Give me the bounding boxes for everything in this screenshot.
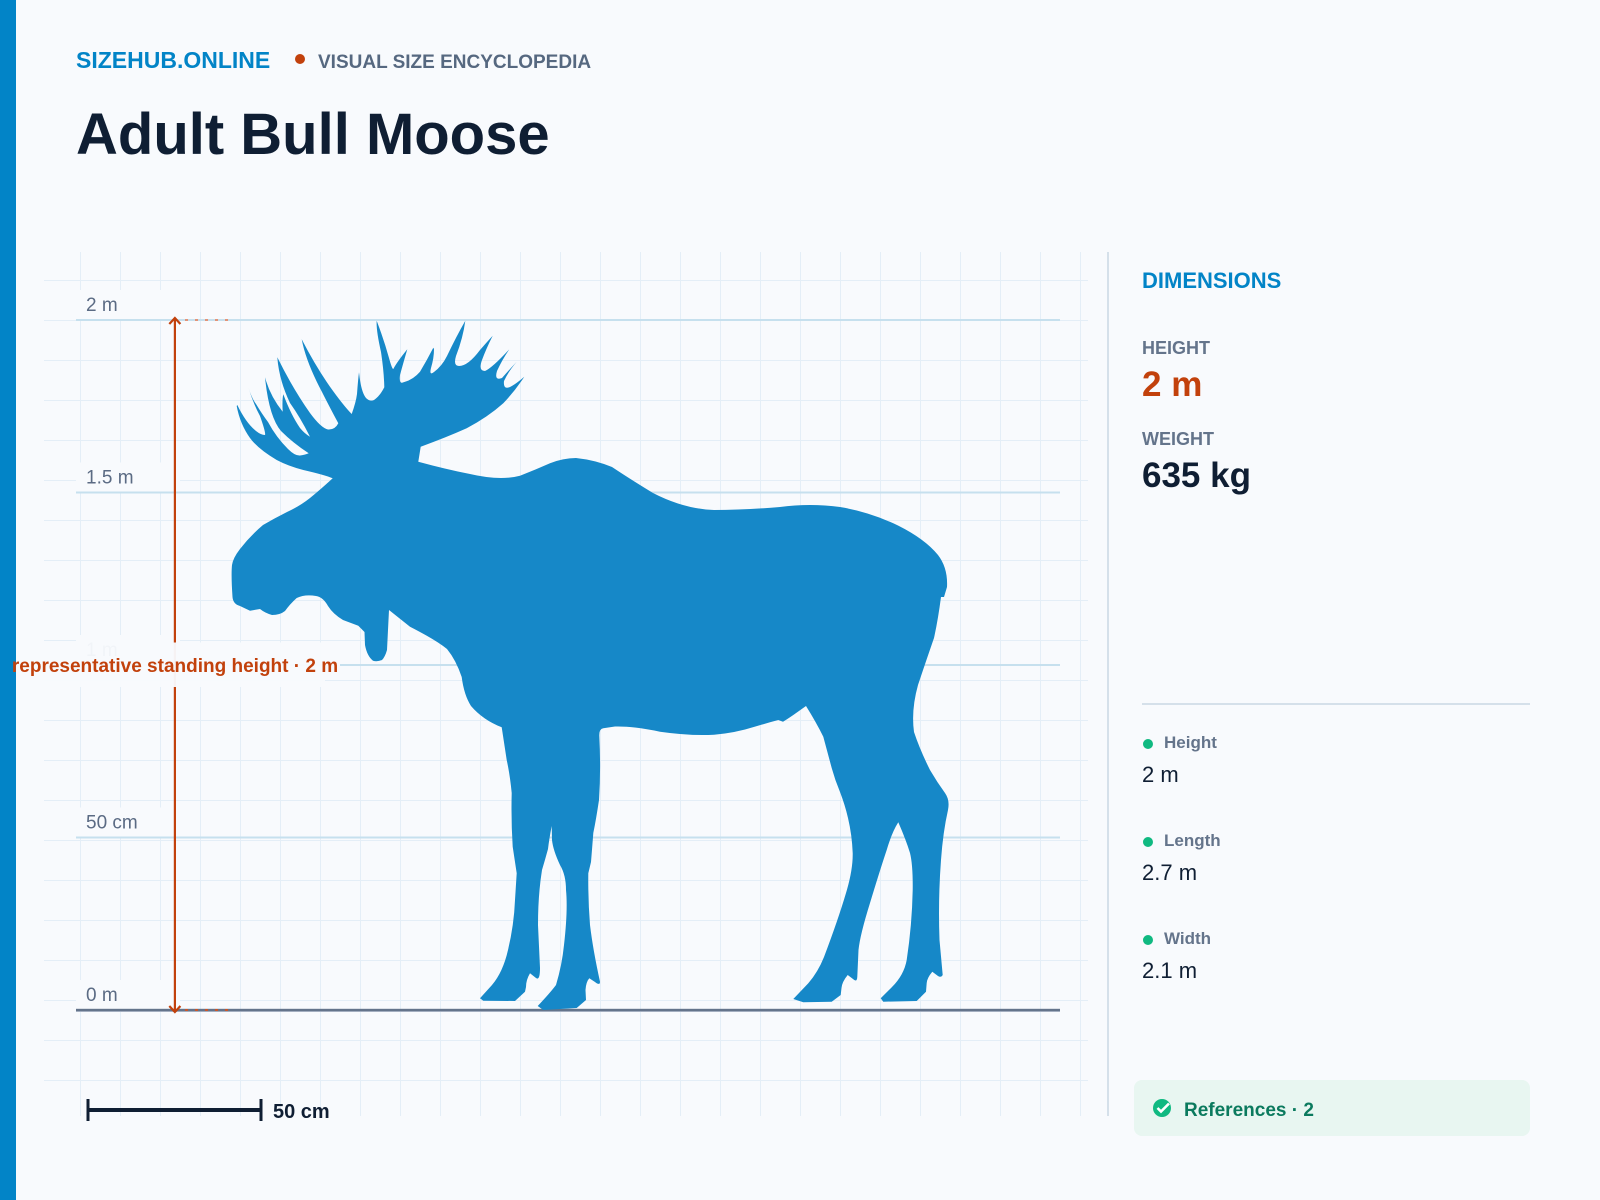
tick: 1.5 m: 1.5 m — [86, 468, 134, 488]
stat: height — [1142, 338, 1210, 404]
tick: 0 m — [76, 980, 180, 1012]
tagline: VISUAL SIZE ENCYCLOPEDIA — [318, 52, 591, 73]
stat: weight — [1142, 429, 1251, 495]
stat: height: HEIGHT — [1142, 338, 1210, 358]
item: height: Height — [1164, 733, 1217, 752]
tick: 2 m: 2 m — [86, 295, 118, 316]
ground line — [76, 1009, 1060, 1012]
chart: grid background — [44, 252, 1088, 1116]
item: width: Width — [1164, 929, 1211, 948]
tick: 1.5 m — [76, 462, 1060, 494]
height annotation label: representative standing height · 2 m — [12, 656, 338, 677]
references badge — [1134, 1080, 1530, 1136]
panel divider — [1107, 252, 1109, 1116]
item: width — [1142, 929, 1211, 983]
moose silhouette — [232, 321, 949, 1010]
header — [76, 47, 591, 167]
list divider — [1142, 703, 1530, 705]
references text: References · 2 — [1184, 1100, 1314, 1121]
item: length — [1142, 831, 1221, 885]
tick: 50 cm — [76, 808, 1060, 838]
chart: height scale ticks — [76, 290, 1060, 1012]
tick: 1 m — [76, 635, 1060, 666]
title: Adult Bull Moose — [76, 102, 550, 167]
item: length: 2.7 m — [1142, 860, 1197, 885]
accent bar — [0, 0, 16, 1200]
brand name: SIZEHUB.ONLINE — [76, 47, 270, 73]
panel: dimensions — [1107, 252, 1530, 1116]
stat: height: 2 m — [1142, 365, 1202, 404]
item: height: 2 m — [1142, 762, 1179, 787]
scale bar: 50 cm — [273, 1101, 330, 1123]
height annotation label — [12, 642, 340, 687]
item: width: 2.1 m — [1142, 958, 1197, 983]
tick: 0 m: 0 m — [86, 985, 118, 1006]
tick: 2 m — [76, 290, 1060, 321]
panel heading: DIMENSIONS — [1142, 268, 1281, 293]
height arrow — [169, 318, 229, 1012]
tick: 50 cm: 50 cm — [86, 812, 138, 834]
item: length: Length — [1164, 831, 1221, 850]
scale bar — [86, 1099, 330, 1123]
icon: check — [1153, 1099, 1171, 1117]
stat: weight: WEIGHT — [1142, 429, 1214, 449]
item: height — [1142, 733, 1217, 787]
stat: weight: 635 kg — [1142, 456, 1251, 495]
brand dot — [295, 54, 305, 64]
tick: 1 m: 1 m — [86, 640, 118, 661]
